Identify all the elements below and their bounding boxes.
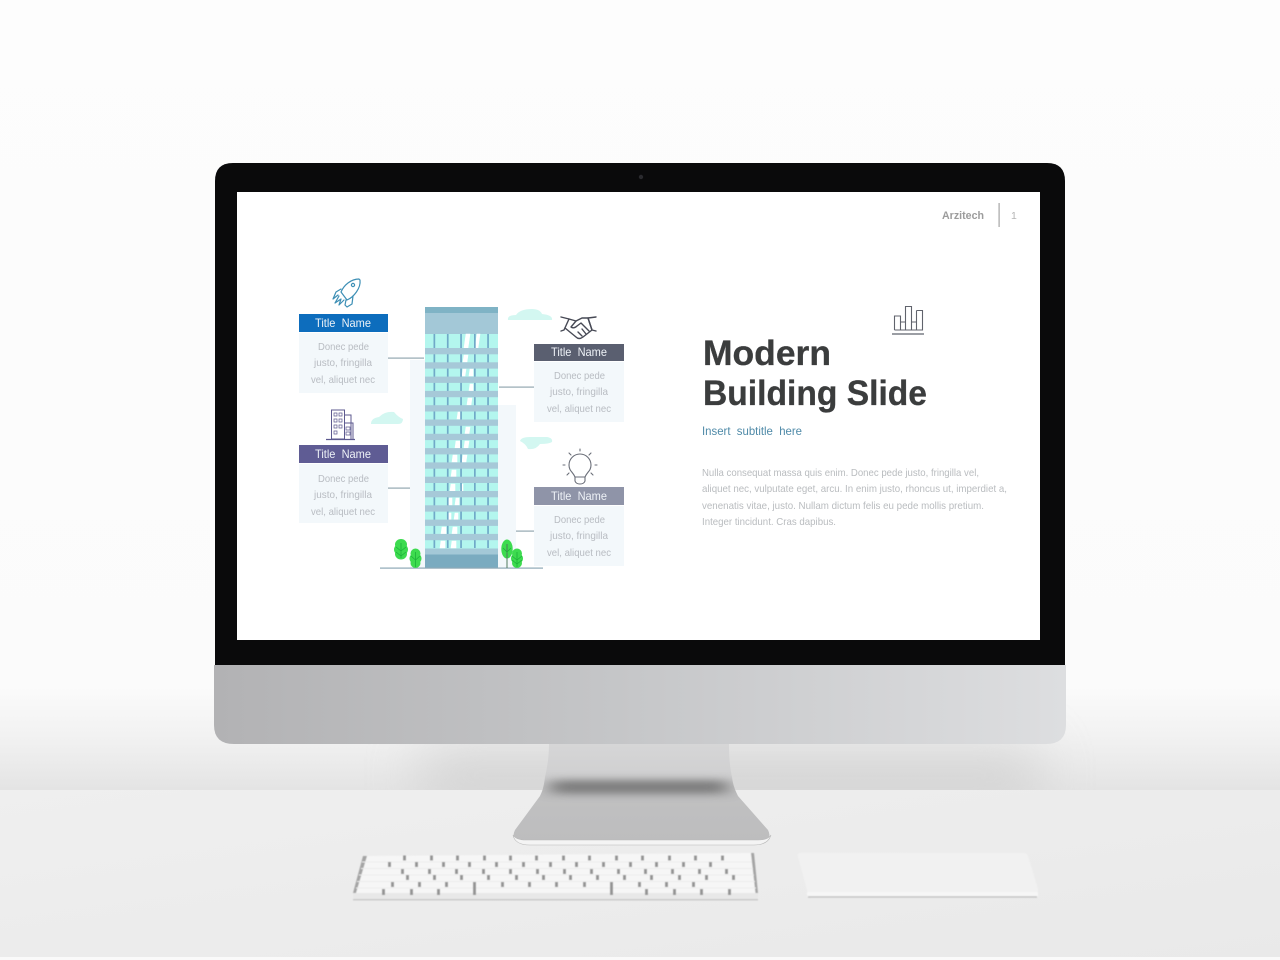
paragraph: Integer tincidunt. Cras dapibus. [702,516,836,528]
icon: rocket [333,279,360,307]
trackpad [798,853,1038,898]
header: brand and page number: 1 [1011,210,1017,222]
header bar [534,487,624,505]
card: handshake [534,317,624,422]
body [534,506,624,566]
keyboard [353,853,758,900]
title [703,334,927,413]
slide screen [237,192,1040,640]
monitor [214,163,1066,744]
camera [639,175,643,179]
ground line [380,568,543,569]
tower [425,307,498,568]
card: rocket [299,279,388,393]
card: light bulb [534,449,624,566]
monitor bezel [215,163,1065,666]
card: rocket: vel, aliquet nec [311,374,375,386]
card: rocket: justo, fringilla [313,357,372,369]
monitor chin [214,665,1066,744]
header bar [299,314,388,332]
card: handshake: vel, aliquet nec [547,403,611,415]
icon: bar chart [892,306,924,334]
paragraph: aliquet nec, vulputate eget, arcu. In enim justo, rhoncus ut, imperdiet a, [702,483,1007,495]
background buildings [410,360,516,568]
card: light bulb: Donec pede [554,514,605,526]
icon: light bulb [563,449,597,484]
icon: office building [326,410,355,440]
card: handshake: Title Name [551,345,607,359]
icon: handshake [561,317,596,338]
keys [382,856,735,895]
body [534,362,624,422]
body [299,464,388,523]
card: handshake: Donec pede [554,370,605,382]
clouds [371,309,552,449]
title: Modern [703,334,831,373]
card: city building: justo, fringilla [313,489,372,501]
card: city building: Title Name [315,447,371,461]
trees [394,539,523,568]
paragraph [702,467,1007,528]
header: brand and page number [942,203,1017,227]
card: light bulb: justo, fringilla [549,530,608,542]
title: Building Slide [703,374,927,413]
card: light bulb: vel, aliquet nec [547,547,611,559]
paragraph: Nulla consequat massa quis enim. Donec pede justo, fringilla vel, [702,467,979,479]
header bar [534,344,624,361]
card: city building: vel, aliquet nec [311,506,375,518]
monitor stand [513,744,771,845]
header bar [299,445,388,463]
background: wall and desk [0,704,1280,957]
card: light bulb: Title Name [551,489,607,503]
connector lines [388,358,534,532]
card: handshake: justo, fringilla [549,386,608,398]
card: city building [299,410,388,523]
subtitle: Insert subtitle here [702,424,802,438]
card: rocket: Title Name [315,316,371,330]
body [299,333,388,393]
card: rocket: Donec pede [318,341,369,353]
card: city building: Donec pede [318,473,369,485]
header: brand and page number: Arzitech [942,210,984,222]
building illustration [371,307,552,569]
paragraph: venenatis vitae, justo. Nullam dictum felis eu pede mollis pretium. [702,500,984,512]
